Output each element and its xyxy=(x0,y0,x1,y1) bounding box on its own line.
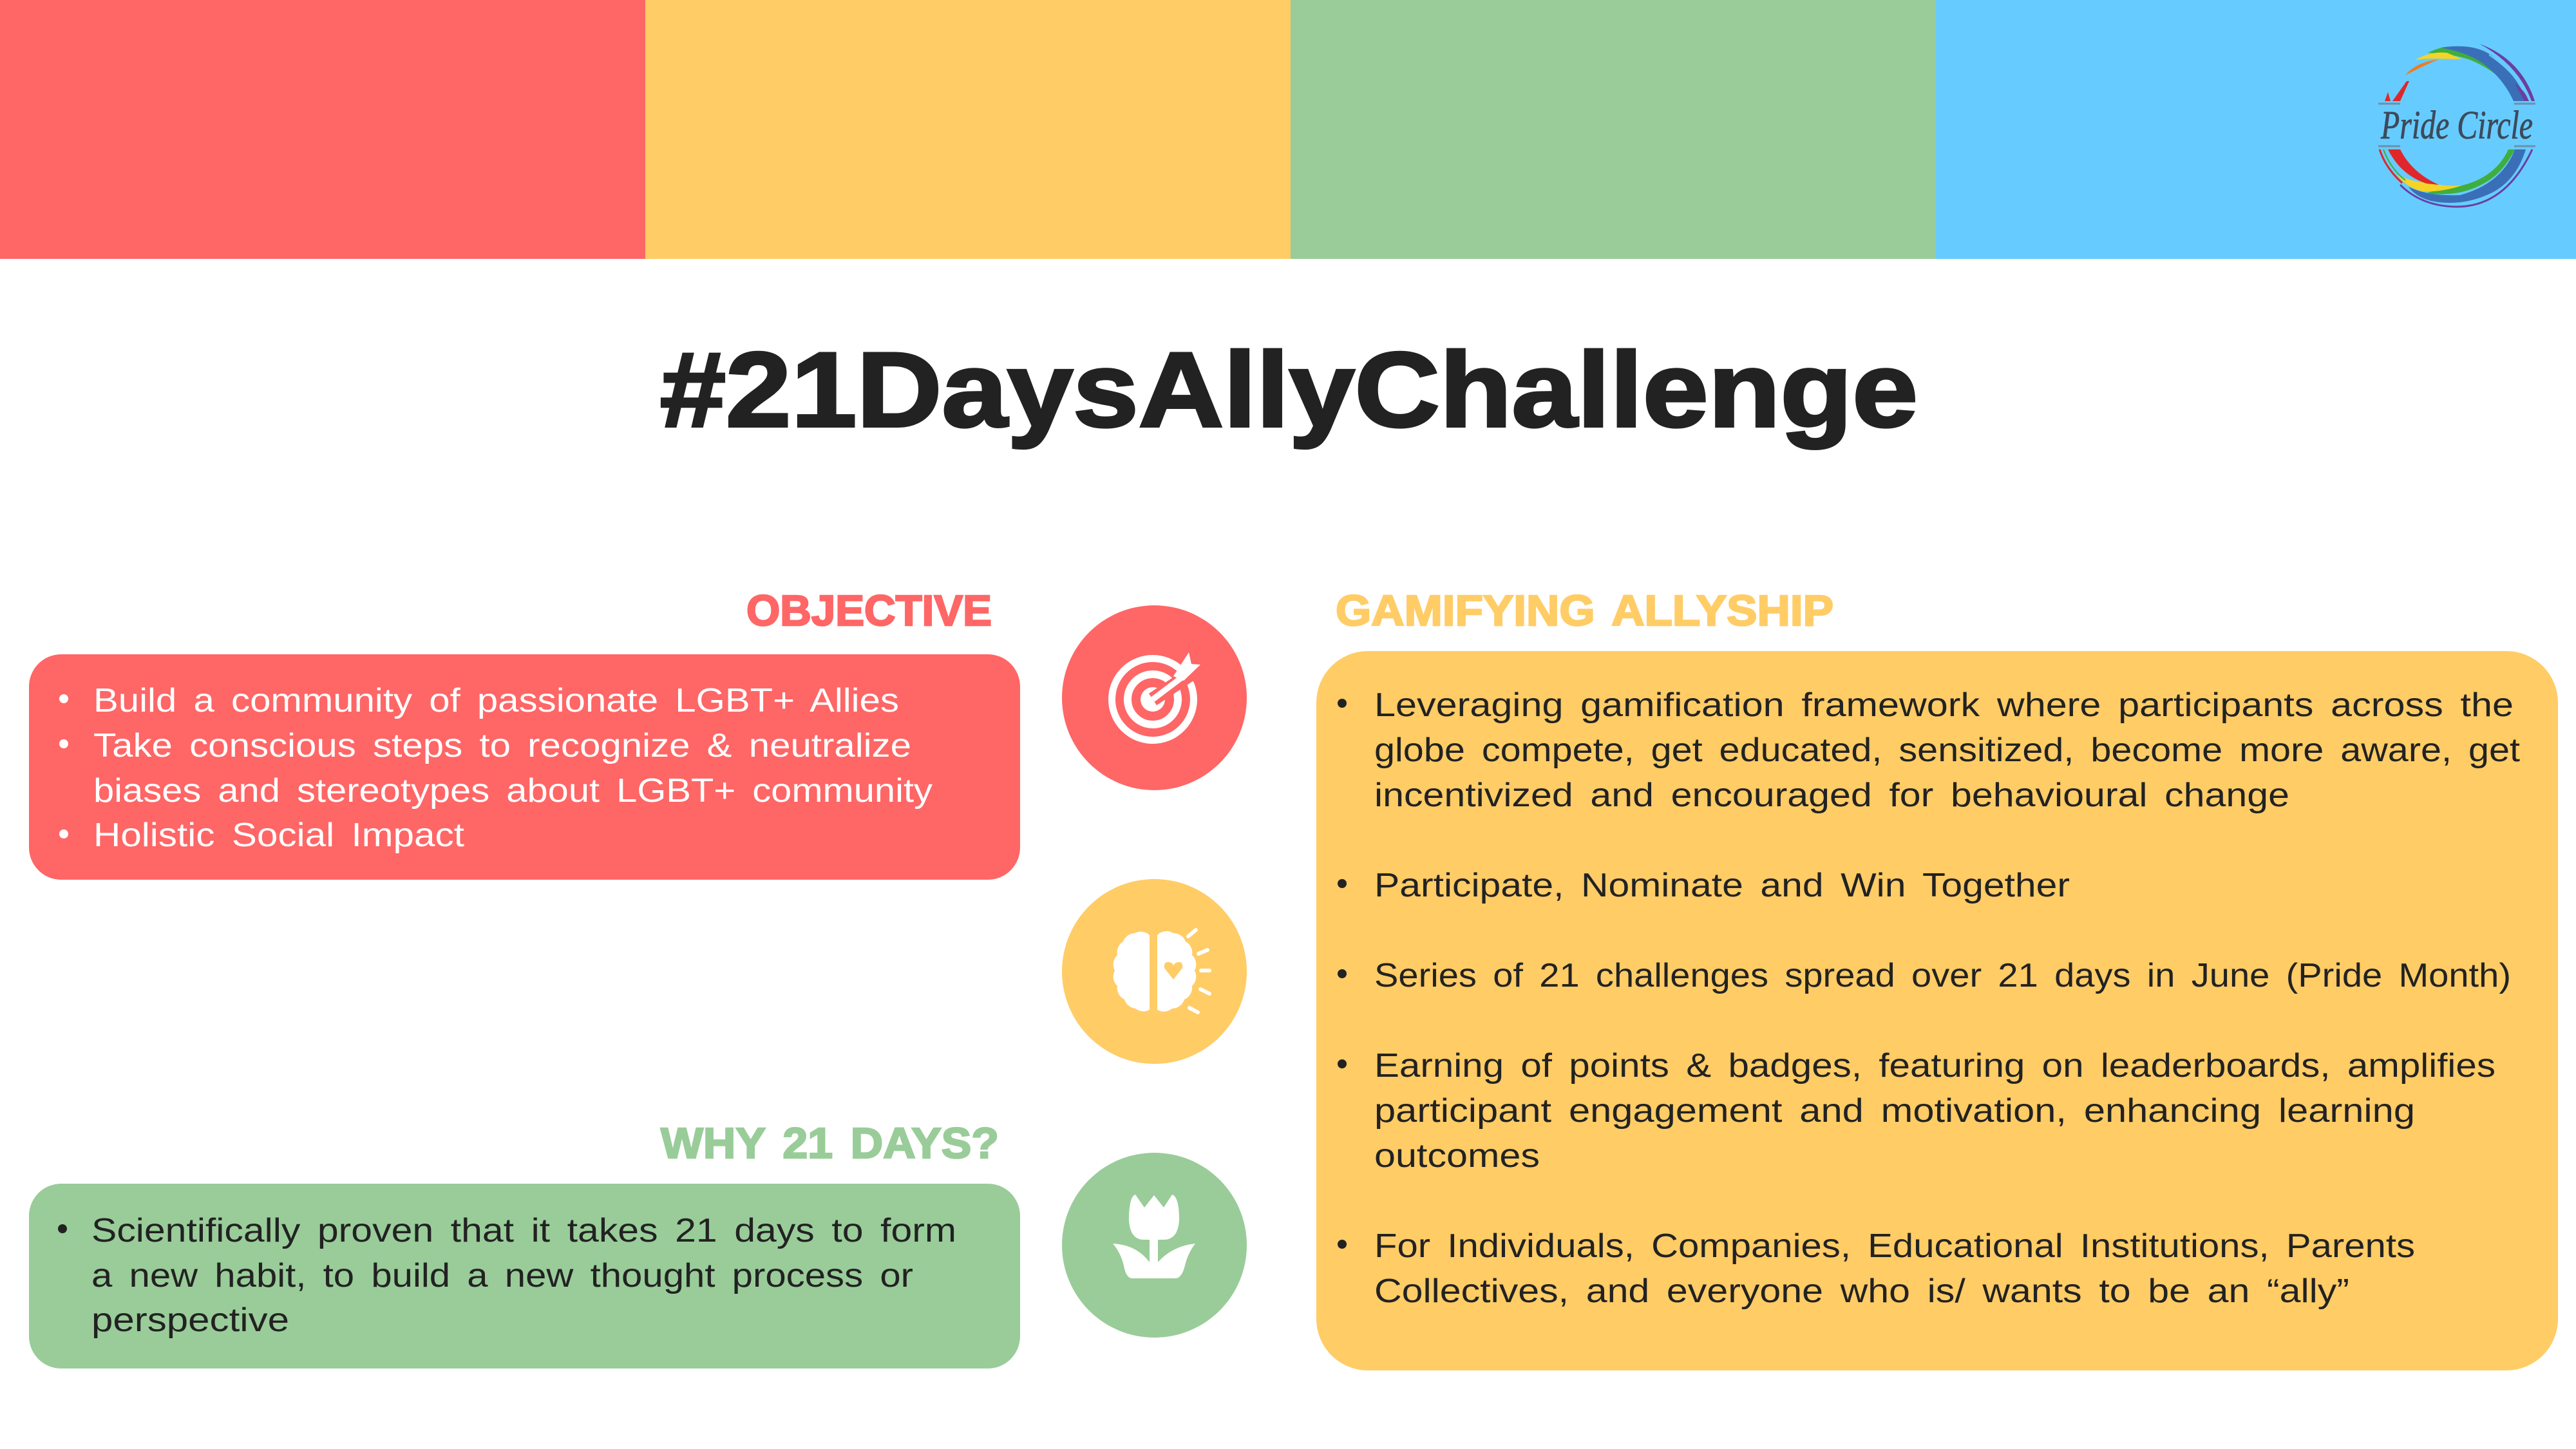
panel: gamifying allyship xyxy=(1316,651,2558,1370)
icon: target xyxy=(1062,605,1247,790)
bullet list: objective: Build a community of passionate LGBT+ Allies xyxy=(93,682,899,719)
icon: brain with heart xyxy=(1062,879,1247,1064)
heading: objective: OBJECTIVE xyxy=(746,587,992,635)
logo: Pride Circle: Pride Circle xyxy=(2380,104,2533,147)
bullet text: why 21 days: perspective xyxy=(91,1302,289,1339)
bullet: points and badges: outcomes xyxy=(1374,1137,1540,1175)
logo: Pride Circle xyxy=(2378,44,2535,207)
bullet: audience: For Individuals, Companies, Educational Institutions, Parents xyxy=(1374,1227,2415,1265)
bullet text: why 21 days: a new habit, to build a new thought process or xyxy=(91,1257,913,1294)
bullet list: objective xyxy=(59,682,933,854)
bullet text: why 21 days: Scientifically proven that it takes 21 days to form xyxy=(91,1212,956,1249)
bullet list: objective: biases and stereotypes about LGBT+ community xyxy=(93,772,933,810)
bullet: participate: Participate, Nominate and Win Together xyxy=(1374,867,2070,904)
bullet: audience xyxy=(1338,1227,2415,1310)
bullet list: objective: Holistic Social Impact xyxy=(93,817,465,854)
bullet: leveraging gamification: Leveraging gamification framework where participants across the xyxy=(1374,687,2514,724)
bullet: points and badges: Earning of points & badges, featuring on leaderboards, amplifies xyxy=(1374,1047,2496,1084)
bullet: leveraging gamification: globe compete, get educated, sensitized, become more aware, get xyxy=(1374,732,2521,769)
bullet: points and badges xyxy=(1338,1047,2496,1175)
bullet: leveraging gamification xyxy=(1338,687,2521,814)
panel: objective xyxy=(29,654,1020,880)
bullet: leveraging gamification: incentivized and encouraged for behavioural change xyxy=(1374,777,2289,814)
heading: gamifying allyship: GAMIFYING ALLYSHIP xyxy=(1336,587,1833,635)
bullet: audience: Collectives, and everyone who is/ wants to be an “ally” xyxy=(1374,1273,2349,1310)
bullet: points and badges: participant engagement and motivation, enhancing learning xyxy=(1374,1092,2415,1130)
header colour band xyxy=(0,0,2576,259)
bullet text: why 21 days xyxy=(58,1212,956,1339)
title: #21DaysAllyChallenge xyxy=(660,330,1918,449)
panel: why 21 days xyxy=(29,1184,1020,1368)
bullet: series of challenges: Series of 21 challenges spread over 21 days in June (Pride Month) xyxy=(1374,957,2511,994)
bullet list: objective: Take conscious steps to recognize & neutralize xyxy=(93,727,911,764)
icon: tulip xyxy=(1062,1153,1247,1338)
heading: why 21 days: WHY 21 DAYS? xyxy=(661,1119,999,1168)
